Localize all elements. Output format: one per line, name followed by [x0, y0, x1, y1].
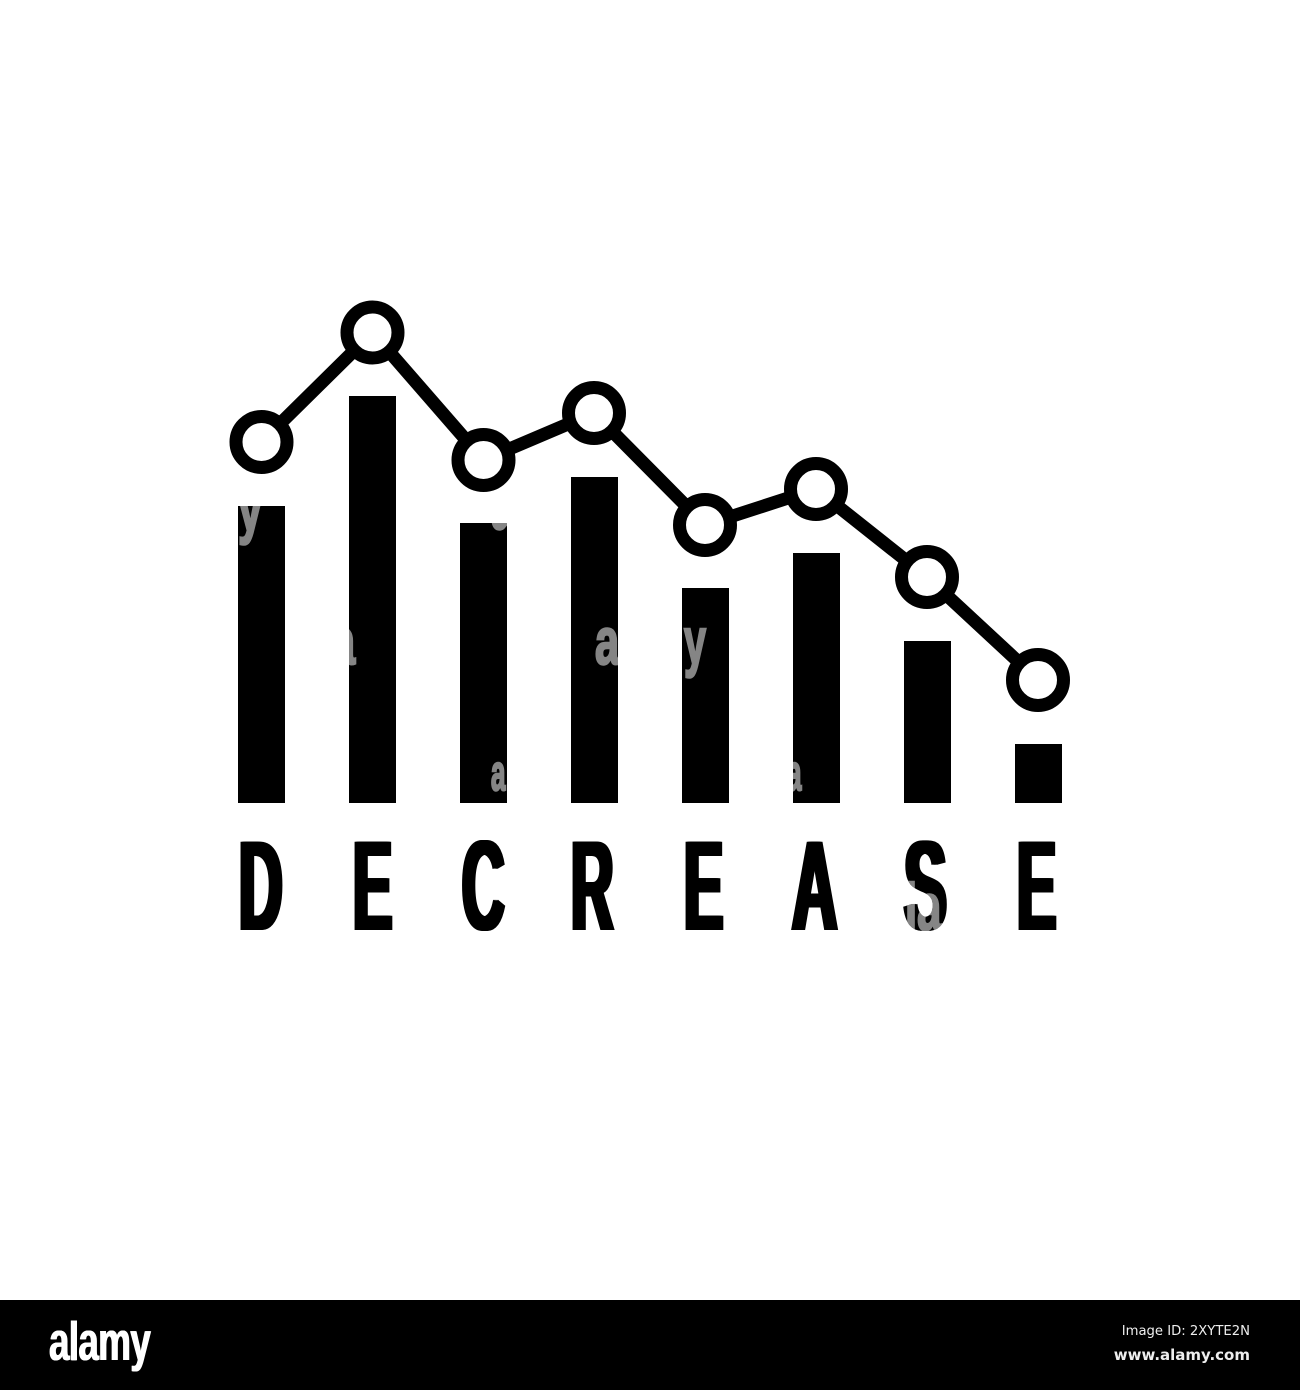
watermark fragments: la — [905, 870, 942, 944]
watermark fragments: a — [787, 746, 802, 801]
image id and website — [1114, 1324, 1250, 1364]
bars — [238, 396, 1062, 803]
title: DECREASE: C — [462, 815, 505, 958]
watermark fragments: a — [595, 604, 620, 678]
watermark fragments: a — [491, 469, 516, 543]
title: DECREASE — [239, 815, 1056, 958]
title: DECREASE: D — [239, 815, 282, 958]
trend line with circular markers — [236, 307, 1064, 706]
image id and website: www.alamy.com — [1114, 1346, 1250, 1364]
footer bar — [0, 1300, 1300, 1390]
title: DECREASE: R — [571, 815, 614, 958]
title: DECREASE: E — [353, 815, 392, 958]
title: DECREASE: E — [1017, 815, 1056, 958]
watermark fragments: a — [491, 746, 506, 801]
image id and website: Image ID: 2XYTE2N — [1122, 1324, 1250, 1339]
title: DECREASE: S — [904, 815, 947, 958]
watermark fragments: y — [238, 471, 262, 545]
title: DECREASE: A — [792, 815, 837, 958]
title: DECREASE: E — [684, 815, 723, 958]
footer logo: alamy — [49, 1310, 150, 1372]
watermark fragments: a — [331, 604, 356, 678]
watermark fragments: y — [684, 605, 706, 679]
